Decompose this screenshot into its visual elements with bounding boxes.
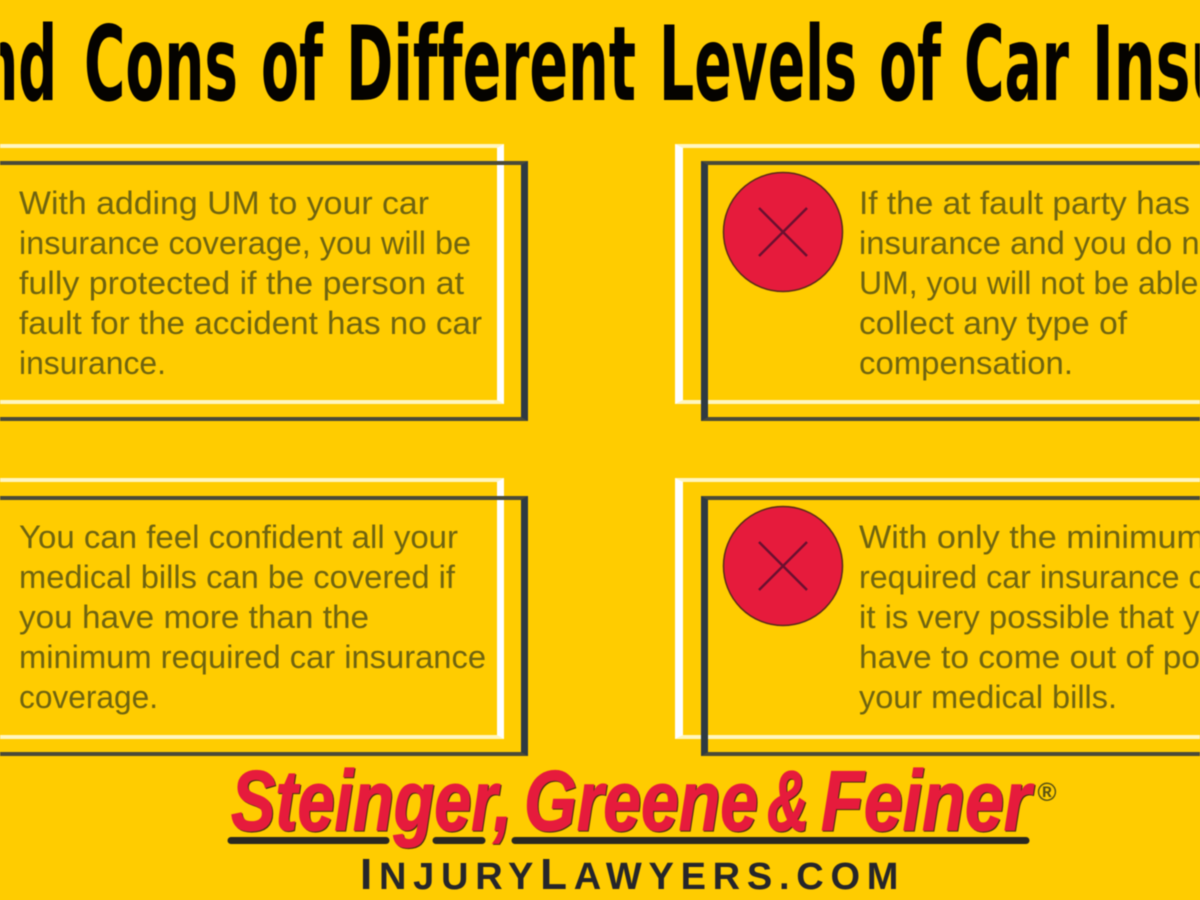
logo: firm name [231, 754, 1034, 849]
text: medical con: With only the minimum [859, 519, 1200, 555]
text: UM con: If the at fault party has [859, 185, 1190, 221]
text: medical pro: you have more than the [19, 599, 369, 635]
text: medical pro: medical bills can be covered if [19, 559, 455, 595]
logo: registered mark: ® [1037, 777, 1057, 807]
text: medical con: your medical bills. [859, 679, 1117, 715]
title [0, 10, 1200, 110]
text: medical pro [18, 519, 486, 716]
text: UM pro: With adding UM to your car [19, 185, 429, 221]
logo [226, 760, 1057, 899]
text: UM pro [18, 185, 482, 381]
panel: pro bottom-left [0, 477, 529, 757]
text: UM con: compensation. [859, 345, 1073, 381]
panel: pro top-left [0, 143, 529, 422]
text: UM con: collect any type of [859, 305, 1127, 341]
text: medical pro: coverage. [19, 679, 158, 715]
text: UM pro: insurance coverage, you will be [19, 225, 471, 261]
text: UM con [859, 185, 1200, 382]
text: UM pro: insurance. [19, 345, 166, 381]
text: medical pro: You can feel confident all your [19, 519, 458, 555]
panel: con top-right [674, 143, 1200, 422]
icon: red X [722, 505, 844, 627]
text: medical con [858, 519, 1200, 716]
text: UM pro: fault for the accident has no car [19, 305, 482, 341]
text: UM pro: fully protected if the person at [19, 265, 464, 301]
logo: underline [231, 837, 1026, 844]
panel: con bottom-right [674, 477, 1200, 757]
icon: red X [722, 171, 844, 293]
text: medical pro: minimum required car insurance [19, 639, 486, 675]
logo: website: INJURYLAWYERS.COM [360, 850, 905, 899]
